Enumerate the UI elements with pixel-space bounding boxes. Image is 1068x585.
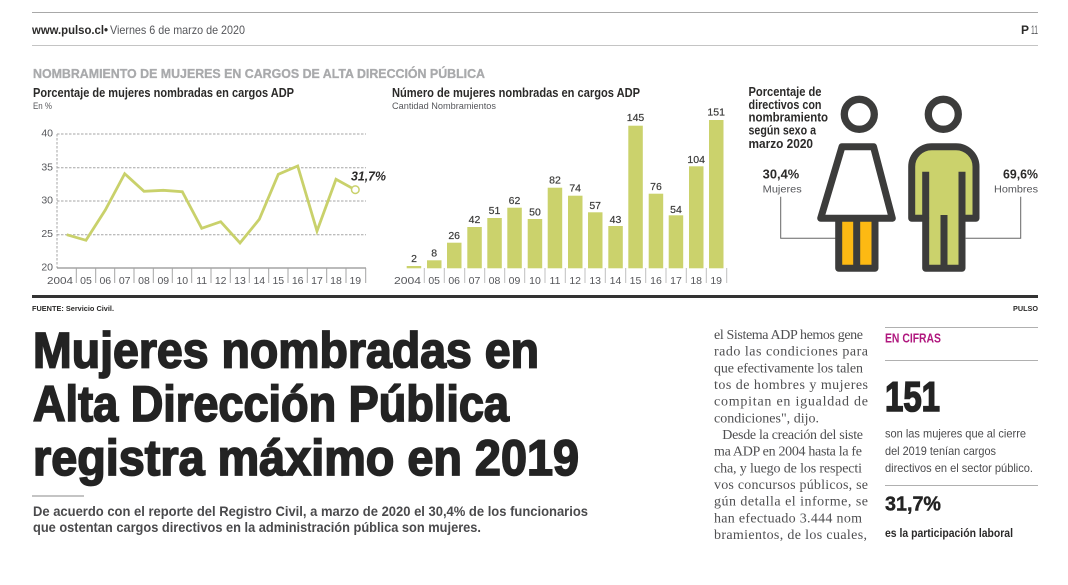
y axis and grid: 25 bbox=[41, 228, 53, 240]
body text column: condiciones", dijo. bbox=[714, 411, 819, 426]
panel heading: directivos con bbox=[748, 98, 822, 112]
page header: 11 bbox=[1031, 23, 1038, 37]
bar chart unit: Cantidad Nombramientos bbox=[392, 101, 496, 111]
panel heading: marzo 2020 bbox=[748, 137, 813, 151]
women label: 30,4% bbox=[763, 167, 799, 181]
x axis years: 07 bbox=[469, 275, 480, 287]
bar values: 8 bbox=[431, 248, 437, 260]
page header: P bbox=[1021, 23, 1029, 37]
body text column: el Sistema ADP hemos gene bbox=[714, 328, 863, 343]
bar values: 62 bbox=[509, 195, 520, 207]
stat 151 description bbox=[885, 427, 1033, 475]
icon: man figure bbox=[912, 99, 976, 268]
bar values: 151 bbox=[707, 106, 725, 118]
bar values: 51 bbox=[489, 205, 500, 217]
bar values: 42 bbox=[469, 214, 480, 226]
x axis years: 16 bbox=[650, 275, 662, 287]
panel: line chart percentage of women bbox=[33, 86, 386, 287]
y axis and grid bbox=[41, 128, 366, 273]
stat 151 description: del 2019 tenían cargos bbox=[885, 444, 996, 458]
title: registra máximo en 2019 bbox=[33, 430, 579, 486]
panel heading bbox=[748, 85, 828, 151]
women label: Mujeres bbox=[763, 183, 802, 195]
x axis years: 19 bbox=[349, 275, 361, 287]
body text column: rado las condiciones para bbox=[714, 345, 869, 360]
last value label: 31,7% bbox=[351, 169, 386, 184]
x axis years: 11 bbox=[196, 275, 207, 287]
bar values: 43 bbox=[610, 214, 621, 226]
x axis years: 12 bbox=[215, 275, 227, 287]
panel: en cifras bbox=[885, 328, 1038, 540]
body text column: gún detalla el informe, se bbox=[714, 495, 868, 510]
x axis years: 05 bbox=[80, 275, 92, 287]
body text column: tos de hombres y mujeres bbox=[714, 378, 868, 393]
panel heading: nombramiento bbox=[748, 111, 828, 125]
body text column: que efectivamente los talen bbox=[714, 361, 863, 376]
source rule and credits: FUENTE: Servicio Civil. bbox=[32, 304, 114, 313]
x axis years: 06 bbox=[99, 275, 111, 287]
panel: bar chart number of women bbox=[392, 86, 727, 287]
bar values: 74 bbox=[569, 182, 581, 194]
stat 151: 151 bbox=[885, 373, 940, 420]
lead paragraph: que ostentan cargos directivos en la administración pública son mujeres. bbox=[33, 519, 481, 535]
x axis years: 09 bbox=[157, 275, 169, 287]
x axis years: 05 bbox=[428, 275, 440, 287]
men label bbox=[994, 167, 1038, 195]
lead paragraph bbox=[33, 503, 588, 535]
stat 31,7% description: es la participación laboral bbox=[885, 528, 1013, 540]
body text column: ma ADP en 2004 hasta la fe bbox=[714, 445, 862, 460]
body text column: vos concursos públicos, se bbox=[714, 478, 868, 493]
icon: woman figure bbox=[821, 99, 892, 268]
x axis years: 08 bbox=[489, 275, 500, 287]
source rule and credits bbox=[32, 296, 1038, 313]
x axis years: 10 bbox=[176, 275, 188, 287]
title bbox=[33, 323, 579, 486]
body text column: cha, y luego de los respecti bbox=[714, 461, 862, 476]
panel heading: Porcentaje de bbox=[748, 85, 822, 99]
line chart heading: Porcentaje de mujeres nombradas en cargos ADP bbox=[33, 86, 294, 100]
x axis years: 18 bbox=[690, 275, 702, 287]
bar values: 145 bbox=[627, 112, 644, 124]
x axis years: 12 bbox=[569, 275, 581, 287]
body text column bbox=[714, 328, 869, 543]
page header bbox=[31, 12, 1038, 46]
x axis years: 17 bbox=[670, 275, 682, 287]
men label: Hombres bbox=[994, 183, 1038, 195]
stat 151 description: son las mujeres que al cierre bbox=[885, 427, 1026, 441]
last point marker bbox=[352, 186, 359, 194]
bar values: 54 bbox=[670, 204, 682, 216]
y axis and grid: 40 bbox=[41, 128, 53, 140]
x axis years: 11 bbox=[550, 275, 561, 287]
bar values: 26 bbox=[448, 230, 460, 242]
body text column: compitan en igualdad de bbox=[714, 395, 868, 410]
y axis and grid: 30 bbox=[41, 194, 53, 206]
bar values: 82 bbox=[549, 174, 561, 186]
body text column: bramientos, de los cuales, bbox=[714, 528, 867, 543]
bar values bbox=[411, 106, 725, 265]
source rule and credits: PULSO bbox=[1013, 304, 1038, 313]
bar chart heading: Número de mujeres nombradas en cargos ADP bbox=[392, 86, 640, 100]
x axis years: 10 bbox=[529, 275, 541, 287]
lead paragraph: De acuerdo con el reporte del Registro Civil, a marzo de 2020 el 30,4% de los funcionarios bbox=[33, 503, 588, 519]
line chart unit: En % bbox=[33, 101, 52, 111]
lead divider bbox=[32, 495, 84, 497]
page header: Viernes 6 de marzo de 2020 bbox=[110, 23, 245, 37]
x axis years: 2004 bbox=[394, 275, 421, 287]
page header: • bbox=[104, 25, 108, 37]
panel: directors by sex bbox=[748, 85, 1038, 268]
x axis years: 13 bbox=[234, 275, 246, 287]
page header: www.pulso.cl bbox=[31, 25, 104, 37]
x axis years: 18 bbox=[330, 275, 342, 287]
women label bbox=[763, 167, 802, 195]
panel heading: según sexo a bbox=[748, 123, 817, 137]
title: Alta Dirección Pública bbox=[33, 376, 510, 432]
x axis years: 07 bbox=[119, 275, 131, 287]
x axis years: 15 bbox=[630, 275, 641, 287]
x axis years: 08 bbox=[138, 275, 150, 287]
bar values: 50 bbox=[529, 206, 541, 218]
x axis years: 2004 bbox=[47, 275, 73, 287]
x axis years bbox=[394, 268, 727, 287]
title: Mujeres nombradas en bbox=[33, 323, 539, 379]
x axis years: 14 bbox=[253, 275, 265, 287]
bar values: 76 bbox=[650, 181, 662, 193]
x axis years: 15 bbox=[272, 275, 284, 287]
infographic section title: NOMBRAMIENTO DE MUJERES EN CARGOS DE ALTA DIRECCIÓN PÚBLICA bbox=[33, 66, 485, 81]
x axis years: 17 bbox=[311, 275, 323, 287]
x axis years: 19 bbox=[710, 275, 722, 287]
body text column: Desde la creación del siste bbox=[722, 428, 863, 443]
bar values: 104 bbox=[687, 154, 705, 166]
stat 31,7%: 31,7% bbox=[885, 494, 941, 516]
x axis years: 14 bbox=[610, 275, 621, 287]
men label: 69,6% bbox=[1003, 167, 1038, 181]
body text column: han efectuado 3.444 nom bbox=[714, 511, 862, 526]
bar values: 2 bbox=[411, 253, 417, 265]
bar values: 57 bbox=[589, 200, 601, 212]
x axis years: 06 bbox=[448, 275, 460, 287]
bars bbox=[407, 120, 724, 268]
stat 151 description: directivos en el sector público. bbox=[885, 461, 1033, 475]
y axis and grid: 35 bbox=[41, 161, 53, 173]
y axis and grid: 20 bbox=[41, 261, 53, 273]
x axis years: 16 bbox=[292, 275, 304, 287]
x axis years: 09 bbox=[509, 275, 520, 287]
women leader line bbox=[781, 197, 838, 238]
data line bbox=[67, 166, 351, 243]
x axis years bbox=[47, 268, 366, 287]
section label: EN CIFRAS bbox=[885, 332, 941, 346]
men leader line bbox=[965, 197, 1021, 238]
x axis years: 13 bbox=[589, 275, 601, 287]
